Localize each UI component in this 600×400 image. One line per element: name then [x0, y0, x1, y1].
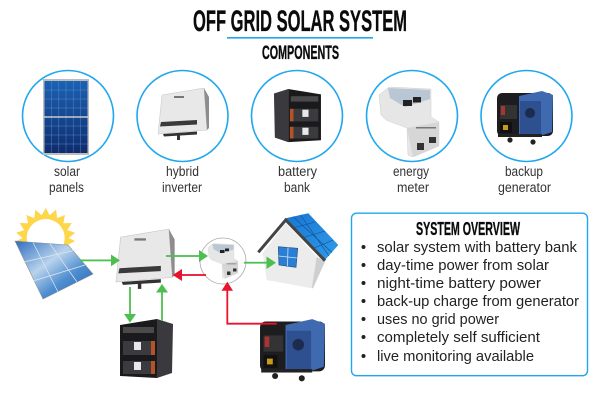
- component: battery bank: battery: [278, 164, 317, 179]
- component: backup generator: [481, 70, 572, 195]
- icon: house with solar roof: [258, 213, 338, 288]
- component: energy meter: meter: [397, 180, 429, 195]
- bullet list: completely self sufficient: [377, 330, 540, 346]
- component: solar panels: panels: [49, 180, 84, 195]
- component: solar panels: solar: [54, 164, 80, 179]
- component: backup generator: generator: [498, 180, 551, 195]
- bullet list: uses no grid power: [377, 312, 499, 328]
- component: energy meter: energy: [393, 164, 429, 179]
- component: battery bank: bank: [284, 180, 310, 195]
- icon: energy meter in ring: [200, 238, 246, 284]
- icon: tilted solar panel: [15, 241, 93, 299]
- component: energy meter: [366, 70, 458, 195]
- component: solar panels: [22, 70, 114, 195]
- bullet list: live monitoring available: [377, 349, 534, 365]
- title: OFF GRID SOLAR SYSTEM: [193, 5, 407, 38]
- arrow: meter to house: [244, 256, 276, 269]
- bullet list: [362, 240, 579, 365]
- bullet list: night-time battery power: [377, 276, 541, 292]
- component: hybrid inverter: hybrid: [166, 164, 199, 179]
- bullet list: solar system with battery bank: [377, 240, 578, 256]
- icon: generator: [260, 319, 325, 381]
- arrow: inverter to meter: [166, 250, 208, 262]
- subheading: components: COMPONENTS: [262, 43, 339, 64]
- icon: sun: [16, 208, 75, 257]
- icon: inverter: [116, 229, 175, 289]
- bullet list: back-up charge from generator: [377, 294, 579, 310]
- component: hybrid inverter: inverter: [162, 180, 202, 195]
- bullet list: day-time power from solar: [377, 258, 549, 274]
- arrow: generator to meter: [222, 282, 277, 324]
- arrow: battery to inverter: [156, 284, 168, 321]
- arrow: meter to inverter: [173, 269, 206, 281]
- overview heading: SYSTEM OVERVIEW: [416, 219, 520, 239]
- arrow: inverter to battery: [124, 287, 136, 323]
- arrow: panel to inverter: [80, 254, 120, 266]
- component: backup generator: backup: [505, 164, 543, 179]
- component: battery bank: [252, 70, 342, 195]
- panel: system overview: [352, 213, 588, 376]
- icon: battery bank: [120, 319, 173, 378]
- component: hybrid inverter: [137, 70, 228, 195]
